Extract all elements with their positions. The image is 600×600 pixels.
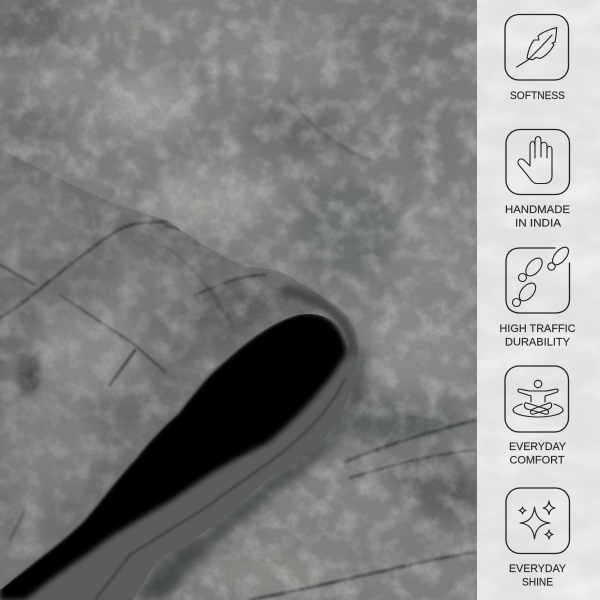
icon: sparkles <box>506 488 570 554</box>
underside band of rug <box>0 345 358 600</box>
feature panel <box>477 0 600 600</box>
icon: feather <box>505 14 568 80</box>
rug opening shadow <box>0 312 347 600</box>
icon: hand <box>506 130 570 194</box>
label: handmade in india: HANDMADE <box>505 204 570 216</box>
feature: everyday comfort <box>505 366 568 466</box>
feature: high traffic durability <box>500 244 576 348</box>
feature: everyday shine: SHINE <box>522 576 553 588</box>
underside stitching <box>95 378 345 600</box>
feature: handmade in india: IN INDIA <box>515 218 562 230</box>
icon: footprints <box>506 244 571 313</box>
folded rug surface <box>0 140 365 600</box>
feature: handmade in india <box>505 130 570 230</box>
label: everyday shine: EVERYDAY <box>509 563 567 575</box>
cast shadow under fold <box>133 345 367 600</box>
bound rug edge <box>0 313 298 588</box>
label: high traffic durability: HIGH TRAFFIC <box>500 323 576 335</box>
feature: softness <box>505 14 568 102</box>
icon: meditating figure <box>505 366 568 432</box>
feature: everyday comfort: COMFORT <box>510 454 565 466</box>
label: softness: SOFTNESS <box>510 90 565 102</box>
label: everyday comfort: EVERYDAY <box>509 441 567 453</box>
feature: high traffic durability: DURABILITY <box>505 336 571 348</box>
feature: everyday shine <box>506 488 570 588</box>
